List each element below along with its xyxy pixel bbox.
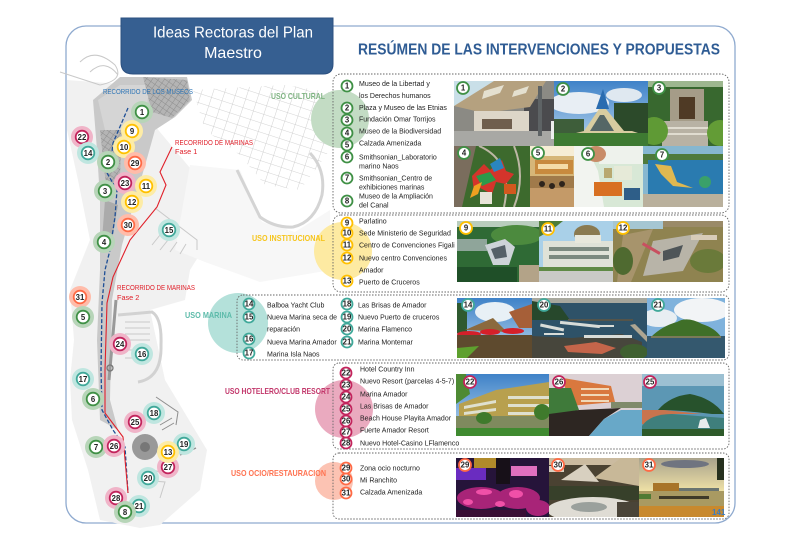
list badge 15 — [244, 312, 254, 322]
cultural list — [342, 80, 447, 210]
photo badge 11 — [542, 223, 554, 235]
marker 19: 19 — [180, 440, 189, 449]
photo 4: Biodiversity museum — [454, 146, 530, 207]
marina list: Marina Montemar — [358, 340, 414, 346]
map: land masses — [67, 80, 215, 528]
marina list: reparación — [267, 326, 300, 334]
marker 17: 17 — [79, 375, 87, 384]
list badge 6: 6 — [345, 153, 350, 162]
outer frame — [66, 26, 735, 523]
list badge 19 — [342, 312, 352, 322]
title banner: Ideas Rectoras del Plan — [153, 24, 313, 42]
category circle: cultural — [311, 90, 369, 148]
marker 22: 22 — [78, 133, 87, 142]
photo badge 2: 2 — [561, 85, 566, 94]
marker 28: 28 — [112, 494, 121, 503]
institutional list: Sede Ministerio de Seguridad — [359, 230, 451, 238]
marker 11: 11 — [142, 182, 151, 191]
photo badge 25: 25 — [646, 378, 655, 387]
marker 16 — [131, 343, 153, 365]
photo badge 29: 29 — [461, 461, 470, 470]
marker 19 — [173, 433, 195, 455]
panel: institutional — [333, 215, 729, 292]
institutional list: Amador — [359, 268, 384, 274]
route label: marinas phase 2: RECORRIDO DE MARINAS — [117, 283, 195, 292]
marker 2: 2 — [106, 158, 111, 167]
route label: marinas phase 2: Fase 2 — [117, 293, 139, 302]
hotel list: Hotel Country Inn — [360, 366, 415, 374]
cultural list: del Canal — [359, 202, 389, 210]
route label: marinas phase 2 — [117, 283, 195, 302]
list badge 19: 19 — [343, 313, 352, 322]
marker 12: 12 — [128, 198, 137, 207]
photo badge 4 — [458, 147, 470, 159]
photo badge 1 — [457, 82, 469, 94]
marker 29: 29 — [131, 159, 140, 168]
photo badge 22 — [464, 376, 476, 388]
list badge 29: 29 — [342, 464, 351, 473]
photo badge 31 — [643, 459, 655, 471]
list badge 8: 8 — [345, 197, 350, 206]
marker 6: 6 — [91, 395, 96, 404]
list badge 9: 9 — [345, 219, 350, 228]
list badge 10: 10 — [343, 229, 352, 238]
photo 22: Country Inn hotel — [456, 374, 549, 436]
title banner — [121, 18, 333, 74]
cultural list: Museo de la Biodiversidad — [359, 128, 441, 136]
marker 18: 18 — [150, 409, 159, 418]
list badge 14 — [244, 298, 254, 310]
list badge 24: 24 — [342, 393, 351, 402]
marker 23: 23 — [121, 179, 130, 188]
list badge 16: 16 — [245, 335, 254, 344]
marina list: Nuevo Puerto de cruceros — [358, 314, 440, 322]
photo 12: convention center aerial — [613, 221, 723, 282]
marker 28 — [105, 487, 127, 509]
marker 6 — [82, 388, 104, 410]
leisure list: Mi Ranchito — [360, 478, 397, 484]
photo 14: Balboa Yacht Club — [457, 298, 532, 358]
photo 6: lab scientist — [574, 146, 643, 207]
list badge 7: 7 — [345, 174, 349, 183]
marker 5: 5 — [81, 313, 86, 322]
list badge 30: 30 — [342, 475, 351, 484]
category label: marina: USO MARINA — [185, 310, 232, 320]
map: city street grid — [193, 85, 330, 190]
marker 25: 25 — [131, 418, 140, 427]
photo badge 30: 30 — [554, 461, 563, 470]
marker 12 — [121, 191, 143, 213]
list badge 2: 2 — [345, 104, 350, 113]
hotel list: Nuevo Hotel-Casino LFlamenco — [360, 440, 459, 448]
route: red marinas route — [105, 147, 172, 493]
list badge 31: 31 — [342, 489, 351, 498]
marker 30 — [117, 214, 139, 236]
map: roads and docks — [60, 55, 323, 498]
category label: cultural: USO CULTURAL — [271, 91, 325, 101]
institutional list: Centro de Convenciones Figali — [359, 242, 455, 250]
photo 31: Calzada Amenizada — [639, 458, 724, 517]
hotel list: Nuevo Resort (parcelas 4-5-7) — [360, 378, 454, 386]
photo 26: Beach House hotel — [549, 374, 642, 436]
marker 9: 9 — [130, 127, 135, 136]
photo badge 20: 20 — [540, 301, 549, 310]
category label: institutional: USO INSTITUCIONAL — [252, 233, 325, 243]
marker 1: 1 — [140, 108, 145, 117]
photo badge 31: 31 — [645, 461, 654, 470]
marker 24: 24 — [116, 340, 125, 349]
photo 30: Mi Ranchito — [549, 458, 639, 517]
marker 1 — [131, 101, 153, 123]
photo badge 14: 14 — [464, 301, 473, 310]
cultural list: Museo de la Libertad y — [359, 81, 430, 88]
list badge 1: 1 — [345, 82, 350, 91]
photo badge 12 — [617, 222, 629, 234]
photo 3: Omar Torrijos foundation — [648, 81, 723, 146]
institutional list: Puerto de Cruceros — [359, 280, 420, 286]
cultural list: Fundación Omar Torrijos — [359, 116, 436, 124]
marker 21 — [128, 495, 150, 517]
marker 4: 4 — [102, 238, 107, 247]
cultural list: Plaza y Museo de las Etnias — [359, 105, 447, 112]
list badge 15: 15 — [245, 313, 254, 322]
photo badge 21: 21 — [654, 301, 663, 310]
panel: hotel / club resort — [333, 363, 729, 449]
list badge 11: 11 — [343, 241, 352, 250]
list badge 21: 21 — [343, 338, 352, 347]
photo 5: interior — [530, 146, 574, 207]
hotel list: Beach House Playita Amador — [360, 416, 452, 422]
route label: marinas phase 1 — [175, 138, 253, 156]
list badge 13: 13 — [343, 277, 352, 286]
marker 11 — [135, 175, 157, 197]
photo badge 11: 11 — [544, 225, 553, 234]
marker 20 — [137, 467, 159, 489]
category label: hotel: USO HOTELERO/CLUB RESORT — [225, 386, 331, 396]
list badge 16 — [244, 334, 254, 344]
marker 31 — [69, 286, 91, 308]
photo badge 5 — [532, 147, 544, 159]
marina list: Nueva Marina seca de — [267, 314, 337, 322]
list badge 17 — [244, 348, 254, 358]
list badge 18: 18 — [343, 300, 352, 309]
photo badge 4: 4 — [462, 149, 467, 158]
route: blue dashed museums route — [101, 108, 128, 493]
marina list: Nueva Marina Amador — [267, 340, 337, 346]
photo badge 3: 3 — [657, 84, 662, 93]
photo badge 26: 26 — [555, 378, 564, 387]
marker 10 — [113, 136, 135, 158]
cultural list: marino Naos — [359, 164, 399, 170]
marker 23 — [114, 172, 136, 194]
marker 26: 26 — [110, 442, 119, 451]
marina list: Marina Flamenco — [358, 326, 412, 334]
cultural list: Smithsonian_Laboratorio — [359, 154, 437, 162]
list badge 20 — [342, 324, 352, 334]
list badge 18 — [342, 298, 352, 310]
category circle: leisure — [315, 462, 353, 500]
category label: leisure: USO OCIO/RESTAURACION — [231, 468, 326, 478]
marker 13 — [157, 441, 179, 463]
marker 15 — [158, 219, 180, 241]
photo badge 9: 9 — [464, 224, 469, 233]
list badge 22: 22 — [342, 369, 351, 378]
main heading: RESÚMEN DE LAS INTERVENCIONES Y PROPUESTAS — [358, 40, 720, 58]
route label: marinas phase 1: Fase 1 — [175, 147, 197, 156]
route label: museums: RECORRIDO DE LOS MUSEOS — [103, 87, 193, 96]
photo 9: Parlatino aerial — [457, 221, 539, 282]
map markers — [69, 101, 195, 523]
photo 29: night club — [456, 458, 549, 517]
route label: marinas phase 1: RECORRIDO DE MARINAS — [175, 138, 253, 147]
marker 16: 16 — [138, 350, 147, 359]
photo badge 9 — [460, 222, 472, 234]
page number: 141 — [712, 508, 726, 517]
photo badge 2 — [557, 83, 569, 95]
photo badge 21 — [652, 299, 664, 311]
marker 2 — [97, 151, 119, 173]
leisure list: Zona ocio nocturno — [360, 466, 420, 472]
institutional list: Parlatino — [359, 218, 387, 226]
list badge 28: 28 — [342, 439, 351, 448]
list badge 21 — [342, 336, 352, 348]
leisure list: Calzada Amenizada — [360, 490, 422, 496]
photo badge 14 — [462, 299, 474, 311]
marker 31: 31 — [76, 293, 85, 302]
marker 10: 10 — [120, 143, 129, 152]
photo 1: museum canopy — [454, 81, 554, 146]
list badge 12: 12 — [343, 254, 352, 263]
list badge 27: 27 — [342, 428, 350, 437]
marker 22 — [71, 126, 93, 148]
marker 8 — [114, 501, 136, 523]
panel: leisure / restaurants — [333, 453, 729, 523]
cultural list: exhibiciones marinas — [359, 184, 425, 192]
photo badge 7 — [656, 149, 668, 161]
photo 7: marine exhibition mural — [643, 146, 723, 207]
institutional list — [342, 218, 455, 286]
photo badge 25 — [644, 376, 656, 388]
marker 13: 13 — [164, 448, 173, 457]
marker 7 — [85, 436, 107, 458]
hotel list: Las Brisas de Amador — [360, 404, 429, 410]
hotel list: Marina Amador — [360, 392, 408, 398]
marina list — [244, 298, 440, 358]
marker 14: 14 — [84, 149, 93, 158]
photo 25: Fuerte Amador — [642, 374, 724, 436]
list badge 25: 25 — [342, 405, 351, 414]
marker 3 — [94, 180, 116, 202]
photo badge 6: 6 — [586, 150, 591, 159]
hotel list: Fuerte Amador Resort — [360, 428, 429, 434]
list badge 20: 20 — [343, 325, 352, 334]
marker 27: 27 — [164, 463, 172, 472]
photo badge 6 — [582, 148, 594, 160]
marker 3: 3 — [103, 187, 108, 196]
list badge 4: 4 — [345, 129, 350, 138]
cultural list: Museo de la Ampliación — [359, 194, 433, 200]
photo badge 22: 22 — [466, 378, 475, 387]
photo badge 1: 1 — [461, 84, 466, 93]
panel: marina — [237, 295, 730, 360]
site map — [60, 55, 331, 528]
photo badge 29 — [459, 459, 471, 471]
cultural list: Calzada Amenizada — [359, 140, 421, 148]
marker 21: 21 — [135, 502, 144, 511]
marina list: Marina Isla Naos — [267, 352, 320, 358]
marker 30: 30 — [124, 221, 133, 230]
marina list: Balboa Yacht Club — [267, 302, 324, 310]
marker 9 — [121, 120, 143, 142]
photo 21: Isla Naos — [647, 298, 725, 358]
leisure list — [340, 462, 422, 498]
photo badge 7: 7 — [660, 151, 664, 160]
marker 8: 8 — [123, 508, 128, 517]
marker 4 — [93, 231, 115, 253]
marker 7: 7 — [94, 443, 98, 452]
photo 20: Flamenco marina — [532, 298, 647, 358]
category circle: institutional — [314, 222, 372, 280]
marina list: Las Brisas de Amador — [358, 302, 427, 310]
list badge 5: 5 — [345, 141, 350, 150]
marker 29 — [124, 152, 146, 174]
marker 24 — [109, 333, 131, 355]
cultural list: los Derechos humanos — [359, 93, 431, 100]
list badge 23: 23 — [342, 381, 351, 390]
photo 11: Figali convention center — [539, 221, 613, 282]
hotel list — [340, 366, 459, 448]
photo badge 30 — [552, 459, 564, 471]
photo badge 20 — [538, 299, 550, 311]
marker 18 — [143, 402, 165, 424]
cultural list: Smithsonian_Centro de — [359, 176, 432, 182]
photo 2: ethnic museum plaza — [554, 81, 648, 146]
marker 26 — [103, 435, 125, 457]
panel: cultural — [333, 74, 733, 213]
marker 25 — [124, 411, 146, 433]
photo badge 3 — [653, 82, 665, 94]
list badge 17: 17 — [245, 349, 253, 358]
marker 17 — [72, 368, 94, 390]
list badge 3: 3 — [345, 116, 350, 125]
list badge 26: 26 — [342, 417, 351, 426]
category circle: marina — [208, 293, 268, 353]
list badge 14: 14 — [245, 300, 254, 309]
marker 20: 20 — [144, 474, 153, 483]
photo badge 26 — [553, 376, 565, 388]
marker 15: 15 — [165, 226, 174, 235]
photo badge 12: 12 — [619, 224, 628, 233]
marker 27 — [157, 456, 179, 478]
title banner: Maestro — [204, 45, 262, 62]
marker 14 — [77, 142, 99, 164]
institutional list: Nuevo centro Convenciones — [359, 256, 447, 262]
photo badge 5: 5 — [536, 149, 541, 158]
marker 5 — [72, 306, 94, 328]
category circle: hotel — [315, 380, 373, 438]
